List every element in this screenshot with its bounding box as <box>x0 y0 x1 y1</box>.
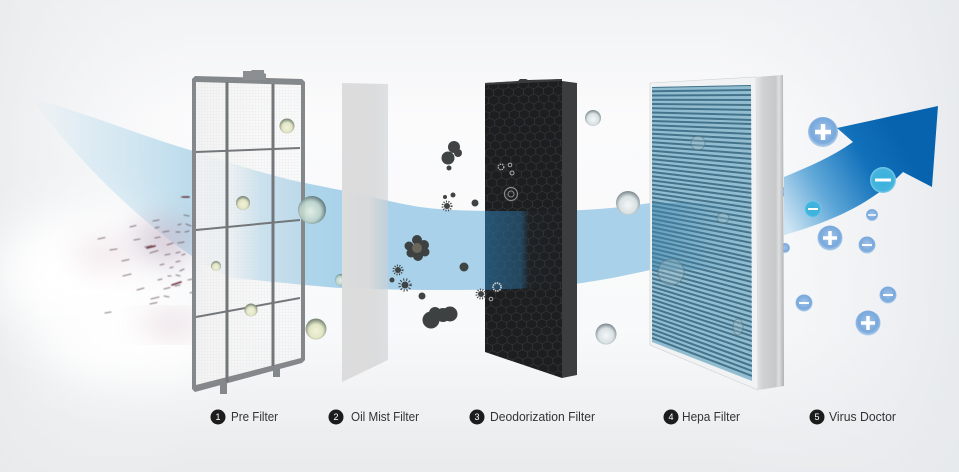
filter 1: pre filter <box>192 70 305 394</box>
label: hepa filter: 4 <box>668 412 674 422</box>
label: hepa filter: Hepa Filter <box>682 410 740 424</box>
label: pre filter: 1 <box>215 412 221 422</box>
mist and pollutant haze <box>0 213 220 380</box>
captured particles on black filter <box>489 163 518 301</box>
band through filter <box>652 203 752 270</box>
minus ion <box>858 236 876 254</box>
label: oil mist filter <box>328 410 419 424</box>
plus ion <box>818 226 842 250</box>
clean air arrow <box>784 106 938 235</box>
lens bubbles <box>658 136 743 335</box>
label: pre filter <box>210 410 278 424</box>
label: virus doctor: Virus Doctor <box>829 410 896 424</box>
minus ion <box>804 200 822 218</box>
label: oil mist filter: Oil Mist Filter <box>351 410 419 424</box>
dust particles <box>98 197 193 313</box>
front face <box>485 79 562 378</box>
filter 3: deodorization filter <box>485 79 577 378</box>
filter 4: hepa filter <box>650 75 784 390</box>
ions behind hepa frame <box>780 187 790 253</box>
frame <box>192 76 305 392</box>
pollutant flower cluster <box>404 235 430 261</box>
droplets on pre filter <box>211 118 326 340</box>
minus ion <box>880 286 896 304</box>
mullions <box>196 82 300 382</box>
droplet: behind oil mist filter <box>335 274 347 286</box>
labels <box>210 410 896 424</box>
label: oil mist filter: 2 <box>333 412 339 422</box>
plus ion <box>808 117 838 147</box>
slat panel <box>652 85 752 381</box>
clear droplets <box>585 110 640 344</box>
side panel <box>562 81 577 378</box>
minus ion <box>866 209 878 221</box>
filter 2: oil mist filter <box>342 83 388 382</box>
slats <box>652 85 752 376</box>
label: hepa filter <box>664 410 740 424</box>
side panel <box>756 75 784 390</box>
label: deodorization filter: Deodorization Filter <box>490 410 595 424</box>
label: deodorization filter: 3 <box>474 412 480 422</box>
small pollutants <box>390 166 486 300</box>
minus ion <box>870 167 896 193</box>
band through filter <box>485 211 565 290</box>
ions <box>796 117 896 336</box>
white frame <box>650 77 758 390</box>
plus ion <box>856 310 880 336</box>
label: pre filter: Pre Filter <box>231 410 278 424</box>
label: virus doctor: 5 <box>814 412 820 422</box>
pollutant cluster top <box>442 141 462 164</box>
air stream band <box>30 97 650 290</box>
tabs <box>243 70 266 80</box>
pollutant cluster bottom <box>422 306 458 328</box>
minus ion <box>796 294 812 312</box>
